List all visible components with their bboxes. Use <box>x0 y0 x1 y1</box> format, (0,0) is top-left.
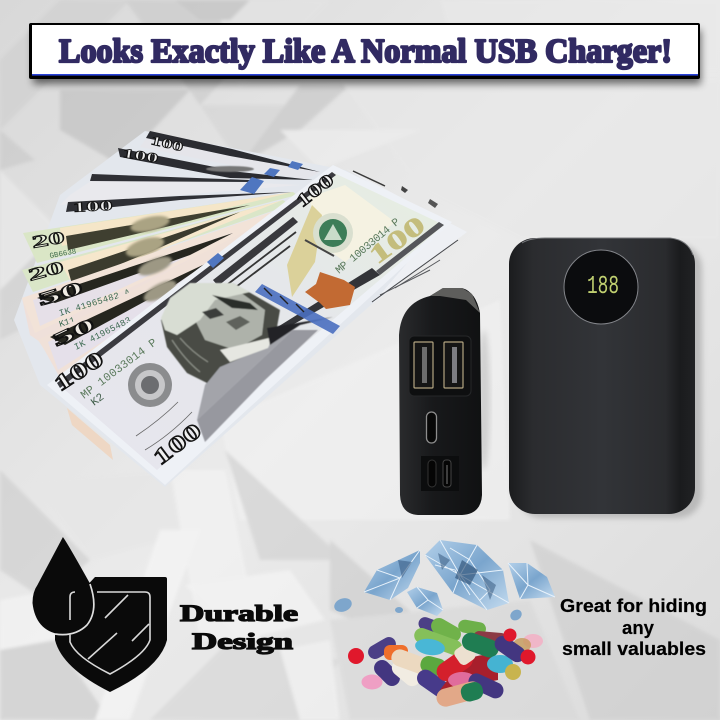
fifty dollar bills: IK 41965483 <box>73 315 133 353</box>
text: Great for hiding any small valuables: any <box>622 617 655 638</box>
top hundred dollar bills: 100 <box>149 132 185 154</box>
twenty dollar bills: 20 <box>26 257 66 285</box>
fan of banknotes <box>14 131 467 487</box>
main hundred dollar bill: 100 <box>148 418 206 470</box>
twenty dollar bills: GB6638 <box>49 248 77 261</box>
fifty dollar bills <box>22 210 285 377</box>
text: Great for hiding any small valuables: small valuables <box>562 638 706 659</box>
text: Durable Design: Design <box>192 629 293 654</box>
fifty dollar bills: 50 <box>49 314 98 351</box>
top hundred dollar bills: 100 <box>72 199 113 216</box>
lower ports <box>428 460 451 487</box>
fifty dollar bills: IK 41965482 A <box>58 288 132 319</box>
back layer pills <box>412 615 543 657</box>
digital readout: 188 <box>587 271 619 301</box>
left diamond <box>364 550 420 600</box>
large corner numerals: 100 <box>49 346 108 396</box>
top hundred dollar bills <box>66 131 320 216</box>
main hundred dollar bill <box>47 165 452 485</box>
dark edge bands <box>57 172 336 388</box>
text: Durable Design: Durable <box>180 601 298 626</box>
power bank: front view with display <box>509 238 702 518</box>
twenty dollar bills: 20 <box>30 227 66 252</box>
copper bell <box>305 272 355 309</box>
tiny diamonds <box>332 596 524 623</box>
text: Great for hiding any small valuables <box>560 595 707 659</box>
watermark area <box>310 185 395 262</box>
pile of pills <box>348 615 543 709</box>
left group <box>348 634 453 701</box>
green seal <box>305 213 353 256</box>
circular display <box>564 250 638 324</box>
engraved name lines <box>228 232 296 290</box>
serial numbers: MP 10033014 P <box>79 336 160 402</box>
fifty dollar bills: 50 <box>35 277 85 310</box>
USB-A ports <box>414 342 463 388</box>
main hundred dollar bill: 100 <box>363 210 431 270</box>
banner title: Looks Exactly Like A Normal USB Charger! <box>59 33 672 70</box>
portrait of Franklin <box>161 283 333 442</box>
treasury seal <box>128 363 172 407</box>
fifty dollar bills: K11 <box>58 316 76 330</box>
paper backing of the fan <box>14 131 467 487</box>
right-hand fanned bill edges <box>345 168 467 304</box>
signatures <box>136 402 192 450</box>
top hundred dollar bills: 100 <box>122 145 159 166</box>
power bank: side view with ports <box>399 288 490 515</box>
center group <box>414 628 536 709</box>
large diamond <box>425 540 509 610</box>
main hundred dollar bill: 100 <box>292 170 338 211</box>
text: Durable Design <box>180 601 298 654</box>
USB-C port <box>426 412 436 443</box>
diamonds <box>332 540 555 623</box>
main hundred dollar bill: MP 10033014 P <box>334 216 403 277</box>
twenty dollar bills <box>22 192 297 292</box>
text: Great for hiding any small valuables: Great for hiding <box>560 595 707 616</box>
blue security ribbon <box>255 284 340 334</box>
banner <box>29 23 701 84</box>
main hundred dollar bill: K2 <box>89 392 107 409</box>
icon: water drop and shield <box>33 538 167 692</box>
middle diamond <box>407 587 443 616</box>
right diamond <box>508 563 555 599</box>
